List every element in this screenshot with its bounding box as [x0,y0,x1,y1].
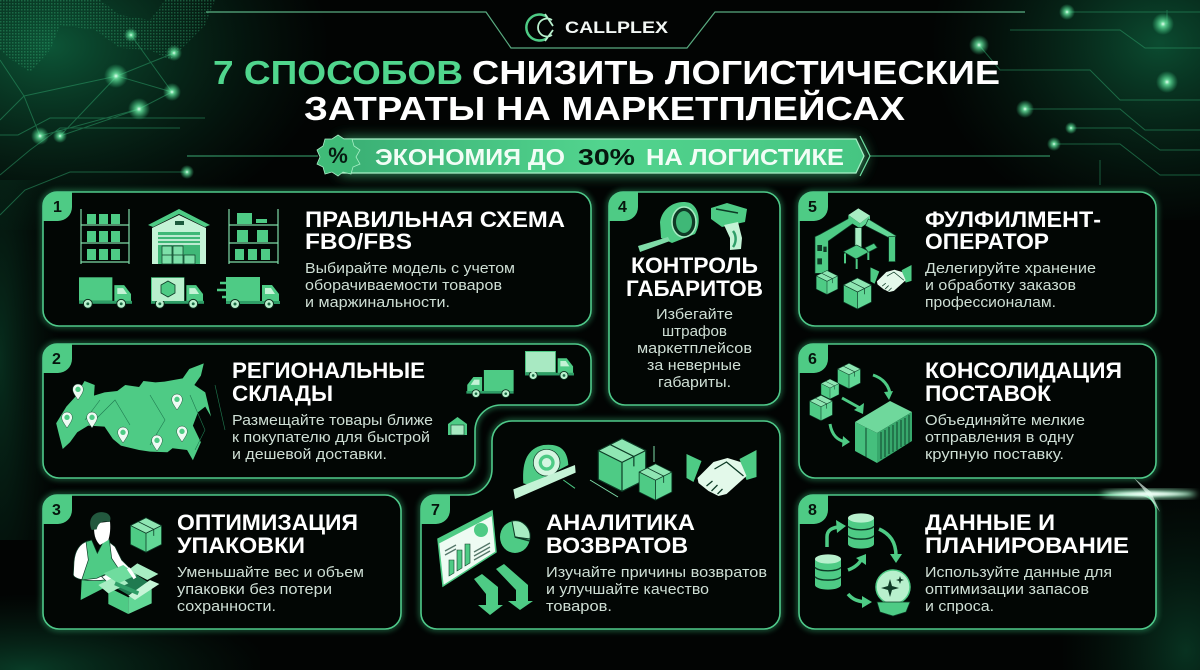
body: Размещайте товары ближе [232,413,433,429]
title: СНИЗИТЬ ЛОГИСТИЧЕСКИЕ [472,54,1000,91]
badge 3 [43,495,72,524]
body [177,565,364,615]
icon: percent badge: % [328,143,348,168]
icon: boxes [816,270,871,309]
heading [626,253,763,301]
panel 2: regional warehouses [43,344,591,478]
heading [546,510,695,558]
heading: ОПТИМИЗАЦИЯ [177,510,358,535]
body [637,307,752,391]
body: маркетплейсов [637,341,752,357]
panel 5: fulfilment [799,192,1156,326]
panel 4: dimensions [609,192,780,405]
panel 8: data [799,495,1156,629]
icon: handshake [870,265,912,292]
badge 2: 2 [52,351,61,368]
map of Russia [56,363,225,460]
heading: УПАКОВКИ [177,533,305,558]
body [925,565,1112,615]
body [305,261,515,311]
logo [526,14,669,41]
body: к покупателю для быстрой [232,430,430,446]
badge 1 [43,192,72,221]
heading: КОНТРОЛЬ [631,253,758,278]
icon: open box [98,563,159,614]
badge 4: 4 [618,199,627,216]
badge 1: 1 [53,199,62,216]
body: сохранности. [177,599,276,615]
badge 2 [43,344,72,373]
heading: ДАННЫЕ И [925,510,1055,535]
badge 4 [609,192,638,221]
badge 6: 6 [808,351,817,368]
badge 8: 8 [808,502,817,519]
banner: ЭКОНОМИЯ ДО [375,144,565,170]
heading [925,510,1129,558]
icon: container [855,401,912,463]
icon: warehouse [148,209,210,264]
body [925,413,1085,463]
body [925,261,1096,311]
icon: left shelf [81,209,129,264]
heading [925,358,1122,406]
body: Изучайте причины возвратов [546,565,767,581]
body: Уменьшайте вес и объем [177,565,364,581]
panel 6: consolidation [799,344,1156,478]
icon: floating box [130,518,162,552]
body: и спроса. [925,599,994,615]
icon: tape measure [638,202,699,252]
badge 5: 5 [808,199,817,216]
heading: СКЛАДЫ [232,381,333,406]
heading [177,510,358,558]
body: профессионалам. [925,295,1056,311]
icon: arrows [830,375,893,447]
body: крупную поставку. [925,447,1064,463]
body: товаров. [546,599,612,615]
icon: pie chart [500,521,530,553]
icon: down arrows [474,564,533,615]
heading: АНАЛИТИКА [546,510,695,535]
body: штрафов [662,324,727,340]
body: оборачиваемости товаров [305,278,502,294]
world map dots [0,0,215,72]
badge 3: 3 [52,502,61,519]
body: оптимизации запасов [925,582,1089,598]
banner: НА ЛОГИСТИКЕ [646,144,844,170]
body: Выбирайте модель с учетом [305,261,515,277]
heading: ГАБАРИТОВ [626,276,763,301]
icon: databases [815,513,874,590]
title: ЗАТРАТЫ НА МАРКЕТПЛЕЙСАХ [304,89,905,127]
panel 3: packaging [43,495,401,629]
body: Объединяйте мелкие [925,413,1085,429]
body: упаковки без потери [177,582,332,598]
badge 5 [799,192,828,221]
heading [232,358,425,406]
body: Делегируйте хранение [925,261,1096,277]
icon: truck 1 [79,277,132,308]
logo frame [206,12,1025,48]
body: отправления в одну [925,430,1075,446]
banner: 30% [578,144,635,170]
banner [187,135,1050,176]
icon: worker [73,512,137,600]
badge 8 [799,495,828,524]
icon: boxes [590,439,672,500]
heading: ВОЗВРАТОВ [546,533,688,558]
panel 7: returns [421,421,780,629]
icon: truck left [466,370,514,398]
body [232,413,433,463]
logo: CALLPLEX [565,18,669,37]
heading: РЕГИОНАЛЬНЫЕ [232,358,425,383]
body: и маржинальности. [305,295,450,311]
heading [305,207,565,254]
body: за неверные [647,358,741,374]
heading: ФУЛФИЛМЕНТ- [925,207,1101,232]
heading: ОПЕРАТОР [925,229,1049,254]
icon: dashboard [438,511,496,586]
icon: handshake [686,450,756,496]
icon: crystal ball [876,570,910,616]
icon: cycle arrows [827,520,902,608]
body: габариты. [658,375,731,391]
icon: small boxes [810,363,860,421]
body: Используйте данные для [925,565,1112,581]
heading [925,207,1101,254]
star flare [1101,478,1197,512]
icon: percent badge [317,135,360,176]
icon: truck with parcel [151,277,204,308]
icon: fast truck [217,277,280,308]
badge 6 [799,344,828,373]
body: Избегайте [656,307,733,323]
panel glow [43,192,1156,629]
icon: tape roll with ruler [513,445,576,499]
glowing nodes [31,4,1178,179]
icon: barcode scanner [711,203,747,250]
icon: small warehouse [448,417,467,435]
body: и обработку заказов [925,278,1076,294]
body: и улучшайте качество [546,582,709,598]
heading: КОНСОЛИДАЦИЯ [925,358,1122,383]
icon: truck right [525,351,574,380]
heading: ПРАВИЛЬНАЯ СХЕМА [305,207,565,232]
icon: robot arm [815,208,896,273]
title [213,54,1000,127]
heading: FBO/FBS [305,229,412,254]
panel 1: FBO/FBS [43,192,591,326]
icon: right shelf [229,209,278,264]
body: и дешевой доставки. [232,447,387,463]
circuit lines [0,10,1200,215]
body [546,565,767,615]
badge 7 [421,495,450,524]
badge 7: 7 [431,502,440,519]
heading: ПОСТАВОК [925,381,1052,406]
title: 7 СПОСОБОВ [213,54,463,91]
heading: ПЛАНИРОВАНИЕ [925,533,1129,558]
